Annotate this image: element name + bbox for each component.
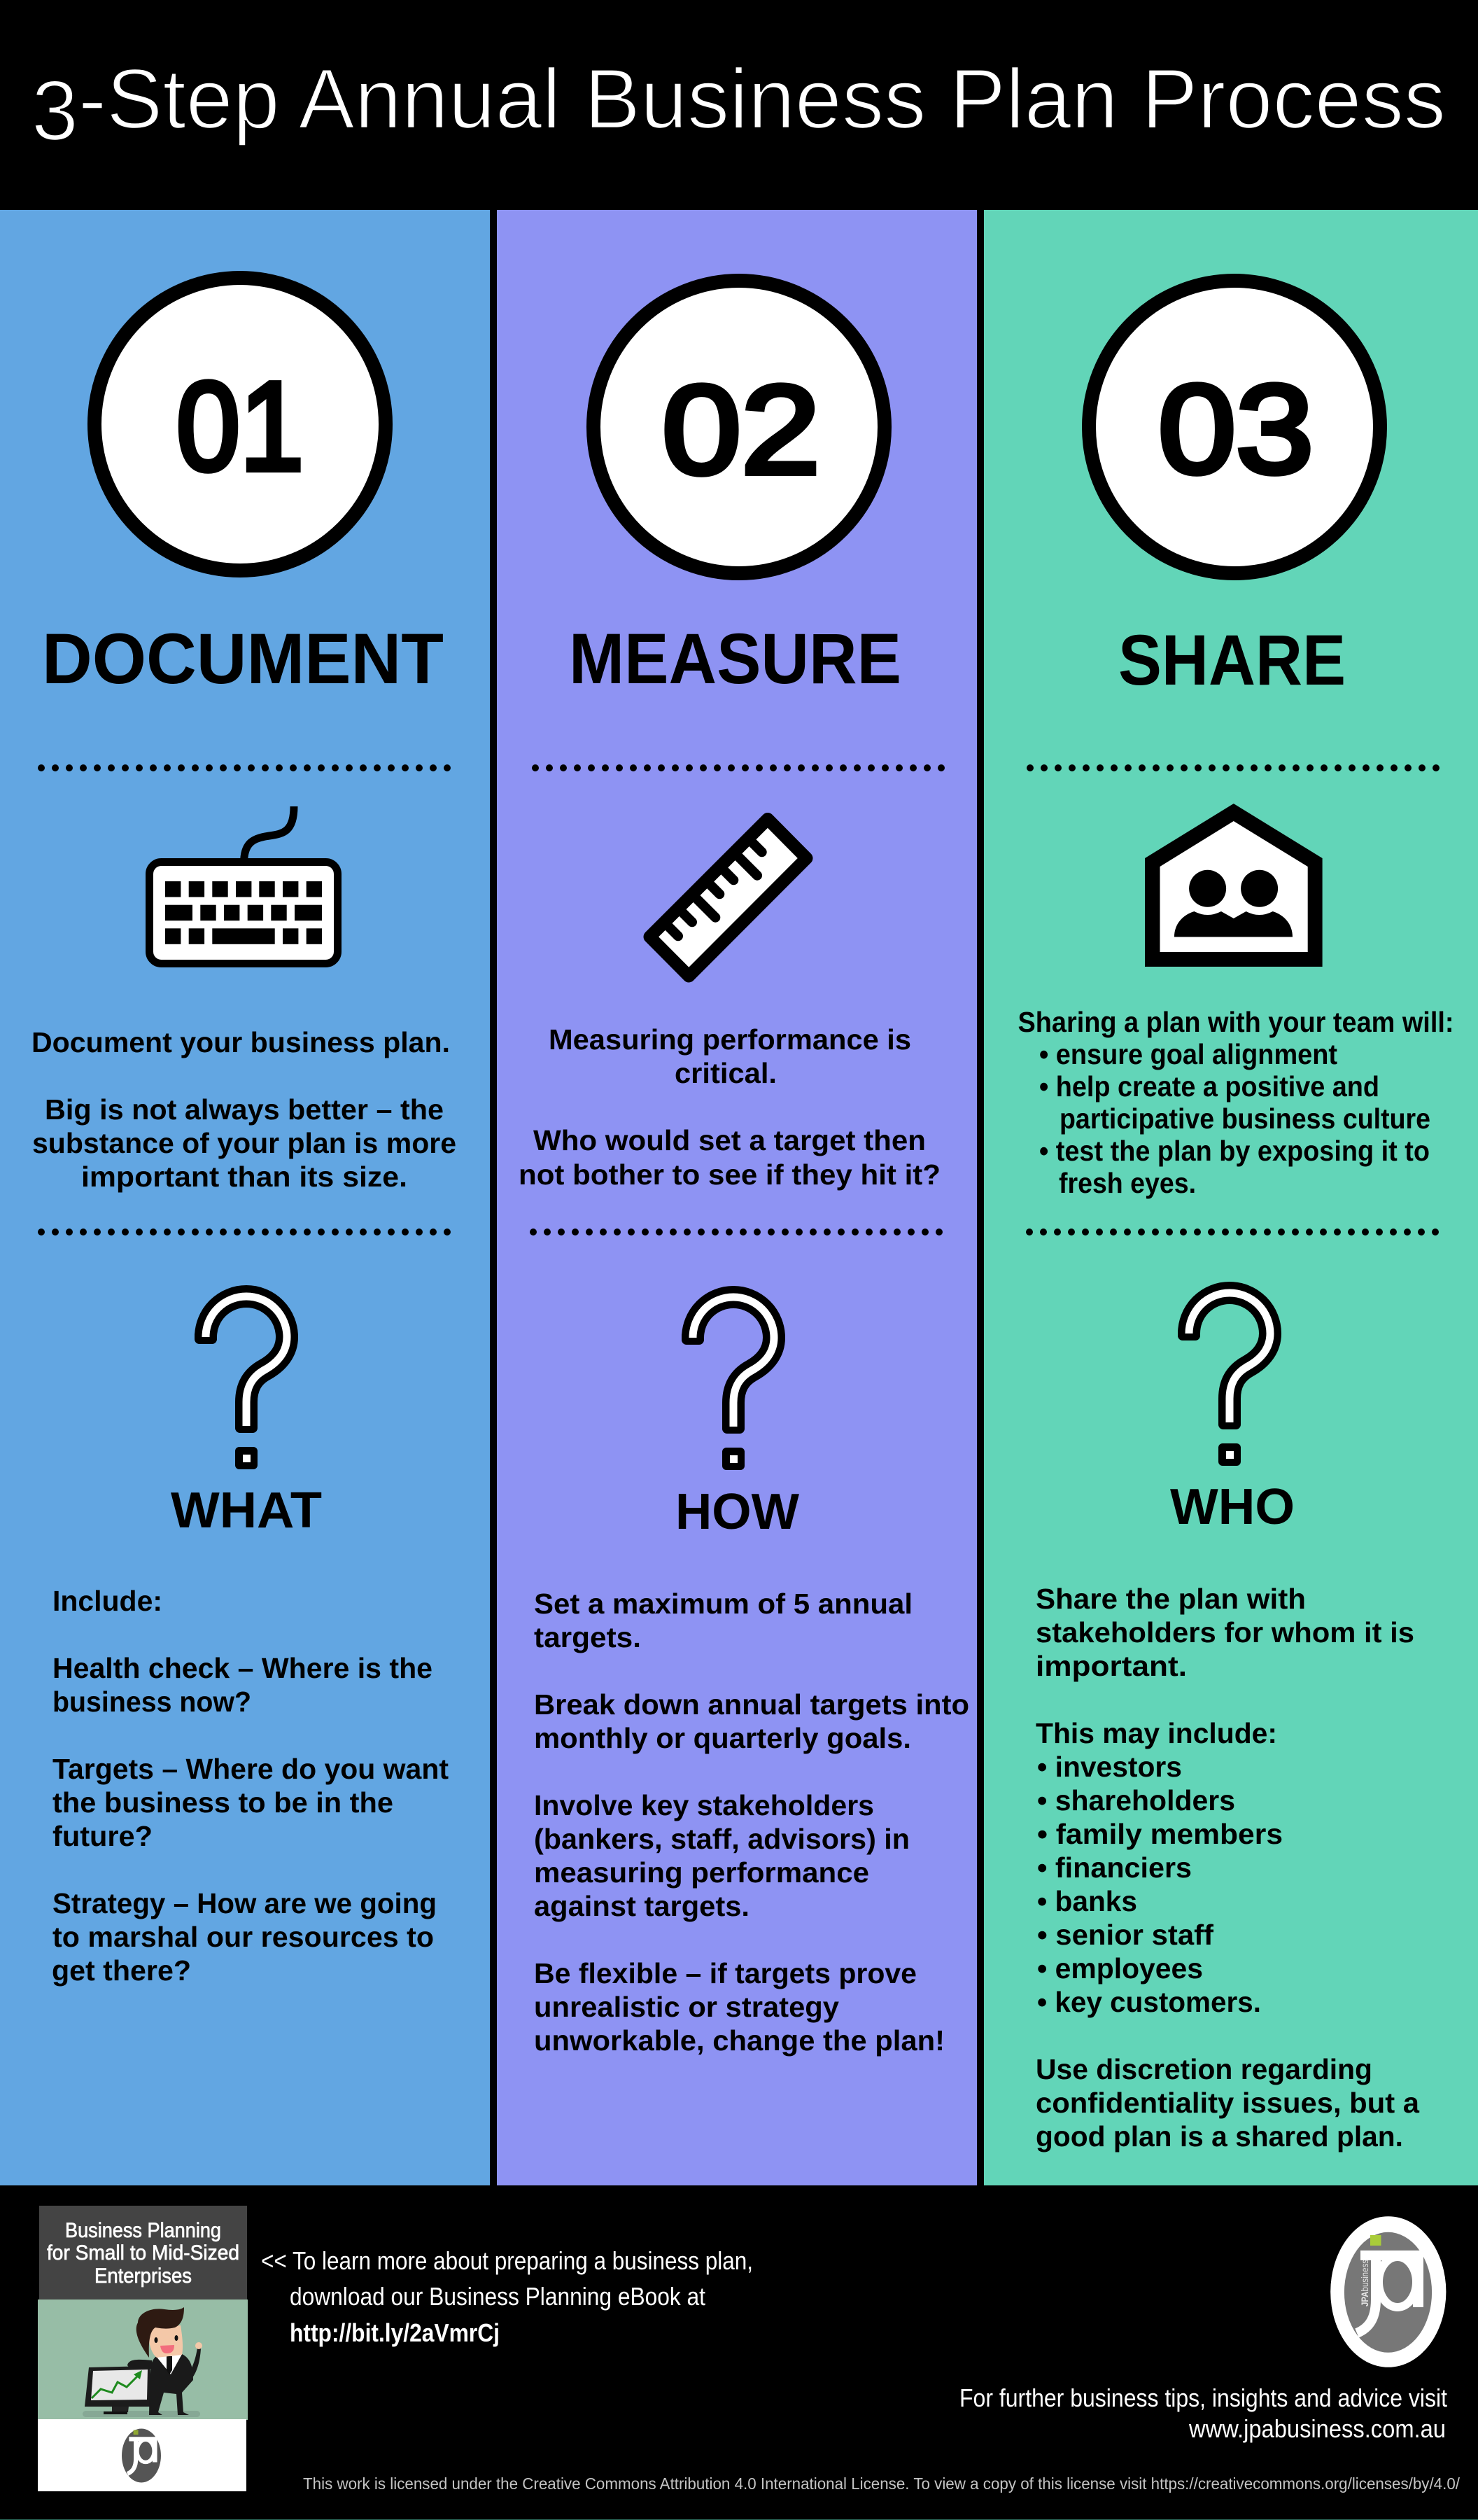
- heading: how: HOW: [675, 1484, 799, 1540]
- text: who details: • senior staff: [1037, 1919, 1213, 1951]
- ebook cover: [38, 2206, 248, 2491]
- text: share summary: Sharing a plan with your team will:: [1018, 1006, 1454, 1038]
- text: measure summary: critical.: [675, 1057, 777, 1089]
- text: who details: good plan is a shared plan.: [1036, 2120, 1403, 2152]
- text: what details: Strategy – How are we going: [52, 1887, 437, 1919]
- text: how details: targets.: [534, 1621, 641, 1653]
- text: what details: future?: [52, 1820, 153, 1852]
- ebook title: for Small to Mid-Sized: [47, 2241, 239, 2264]
- text: share summary: • ensure goal alignment: [1039, 1038, 1337, 1070]
- text: who details: stakeholders for whom it is: [1036, 1616, 1414, 1648]
- heading: who: WHO: [1170, 1479, 1295, 1535]
- text: what details: business now?: [52, 1686, 251, 1718]
- icon: question mark: [1178, 1293, 1270, 1466]
- text: who details: This may include:: [1036, 1717, 1277, 1749]
- text: measure summary: Measuring performance is: [549, 1023, 911, 1056]
- title: -Step Annual Business Plan Process: [78, 51, 1446, 146]
- text: who details: confidentiality issues, but a: [1036, 2087, 1420, 2119]
- title: 3: [31, 63, 78, 158]
- text: document summary: [31, 1026, 456, 1193]
- text: share summary: • help create a positive and: [1039, 1070, 1379, 1102]
- text: how details: against targets.: [534, 1890, 749, 1922]
- number badge 02: [593, 281, 885, 573]
- heading: measure: MEASURE: [569, 619, 901, 699]
- text: document summary: Big is not always better – the: [45, 1093, 444, 1126]
- text: measure summary: Who would set a target then: [533, 1124, 926, 1156]
- illustration: businessman with chart: [83, 2307, 202, 2417]
- ebook title: Business Planning: [65, 2219, 221, 2242]
- jpa business logo: [1330, 2216, 1446, 2367]
- website callout: [959, 2384, 1447, 2443]
- heading: share: SHARE: [1118, 620, 1346, 700]
- text: what details: Include:: [52, 1585, 162, 1617]
- text: who details: Share the plan with: [1036, 1583, 1306, 1615]
- text: who details: • key customers.: [1037, 1986, 1261, 2018]
- ebook title: [47, 2219, 239, 2288]
- text: share summary: • test the plan by exposing it to: [1039, 1135, 1430, 1167]
- text: who details: • banks: [1037, 1885, 1137, 1917]
- text: what details: Targets – Where do you want: [52, 1753, 449, 1785]
- icon: keyboard: [150, 806, 337, 963]
- text: how details: Set a maximum of 5 annual: [534, 1588, 913, 1620]
- text: what details: Health check – Where is the: [52, 1652, 432, 1684]
- text: how details: (bankers, staff, advisors) in: [534, 1823, 910, 1855]
- text: what details: get there?: [52, 1954, 191, 1987]
- icon: question mark: [682, 1297, 774, 1470]
- text: who details: • financiers: [1037, 1851, 1192, 1884]
- text: who details: • shareholders: [1037, 1784, 1235, 1816]
- text: what details: the business to be in the: [52, 1786, 393, 1819]
- text: share summary: fresh eyes.: [1059, 1167, 1196, 1199]
- number badge 03: 03: [1158, 359, 1314, 500]
- panel: document: [0, 210, 490, 2185]
- panel: measure: [497, 210, 977, 2185]
- website callout: www.jpabusiness.com.au: [1188, 2414, 1446, 2443]
- number badge 03: [1089, 281, 1380, 573]
- text: who details: • family members: [1037, 1818, 1283, 1850]
- ebook title: Enterprises: [94, 2264, 192, 2288]
- text: who details: [1036, 1583, 1420, 2152]
- text: how details: unrealistic or strategy: [534, 1991, 839, 2023]
- small jpa logo: [122, 2429, 161, 2482]
- number badge 01: 01: [176, 356, 304, 497]
- text: how details: [534, 1588, 969, 2057]
- text: how details: Break down annual targets into: [534, 1688, 969, 1721]
- ebook callout: << To learn more about preparing a business plan,: [261, 2246, 753, 2275]
- text: how details: Be flexible – if targets prove: [534, 1957, 917, 1989]
- text: measure summary: not bother to see if they hit it?: [519, 1158, 941, 1191]
- number badge 02: 02: [662, 360, 820, 500]
- text: how details: Involve key stakeholders: [534, 1789, 874, 1821]
- text: share summary: participative business culture: [1060, 1102, 1430, 1135]
- text: what details: to marshal our resources to: [52, 1921, 434, 1953]
- text: measure summary: [519, 1023, 941, 1191]
- text: how details: unworkable, change the plan!: [534, 2024, 945, 2057]
- ebook callout: [261, 2246, 753, 2347]
- text: who details: • investors: [1037, 1751, 1182, 1783]
- text: document summary: important than its size.: [81, 1161, 407, 1193]
- license note: This work is licensed under the Creative Commons Attribution 4.0 International License. To view a copy of this license visit https://creativecommons.org/licenses/by/4.0/: [303, 2474, 1461, 2493]
- icon: house with people: [1145, 804, 1323, 967]
- text: who details: Use discretion regarding: [1036, 2053, 1372, 2085]
- icon: question mark: [195, 1296, 287, 1469]
- number badge 01: [94, 278, 386, 570]
- text: document summary: substance of your plan is more: [32, 1127, 456, 1159]
- text: who details: important.: [1036, 1650, 1187, 1682]
- text: document summary: Document your business plan.: [31, 1026, 450, 1058]
- heading: document: DOCUMENT: [42, 619, 444, 699]
- ebook callout: download our Business Planning eBook at: [290, 2282, 705, 2311]
- text: who details: • employees: [1037, 1952, 1203, 1984]
- text: how details: monthly or quarterly goals.: [534, 1722, 911, 1754]
- text: what details: [52, 1585, 449, 1987]
- heading: what: WHAT: [171, 1483, 322, 1539]
- jpa business logo: JPAbusiness: [1359, 2260, 1370, 2306]
- ebook callout: http://bit.ly/2aVmrCj: [290, 2318, 500, 2347]
- text: how details: measuring performance: [534, 1856, 869, 1889]
- icon: ruler: [649, 819, 806, 976]
- panel: share: [984, 210, 1478, 2185]
- text: share summary: [1018, 1006, 1454, 1199]
